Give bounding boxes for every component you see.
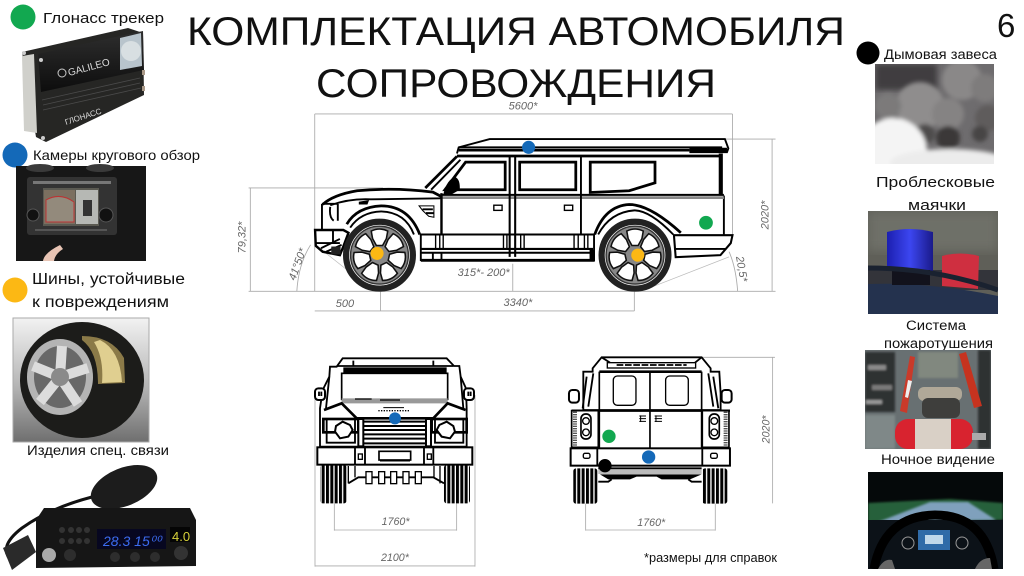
marker: yellow — [2, 278, 28, 302]
side view dimensions: 20,5* — [733, 254, 749, 283]
photo: fire suppression — [865, 350, 991, 449]
label: Система пожаротушения — [884, 318, 993, 351]
vehicle body side — [315, 139, 732, 261]
photo: night vision — [868, 472, 1003, 569]
photo: smoke — [875, 64, 994, 164]
label: Ночное видение: Ночное видение — [881, 452, 995, 467]
rear wheel — [602, 222, 668, 289]
label: Проблесковые маячки: маячки — [908, 197, 966, 214]
marker: black rear view — [598, 459, 612, 472]
front view vehicle — [315, 358, 474, 503]
rear view dimensions: 2020* — [760, 415, 772, 444]
label: Камеры кругового обзор: Камеры кругового обзор — [33, 147, 200, 163]
side view dimensions: 79,32* — [237, 221, 249, 253]
marker: black — [856, 42, 880, 64]
front view dimensions: 2100* — [380, 552, 410, 564]
marker: green — [10, 4, 36, 30]
marker: yellow front wheel — [371, 247, 384, 260]
label: Глонасс трекер: Глонасс трекер — [43, 10, 164, 27]
photo: GLONASS tracker: ГЛОНАСС — [64, 107, 103, 127]
rear view dimensions — [586, 357, 775, 531]
label: Шины, устойчивые к повреждениям: к повреждениям — [32, 294, 169, 311]
label: Проблесковые маячки — [876, 174, 995, 214]
rear view vehicle — [569, 357, 732, 504]
side view dimensions — [237, 100, 776, 311]
page number: 6 — [997, 7, 1015, 44]
side view dimensions: 3340* — [503, 297, 533, 309]
marker: blue rear view — [642, 450, 655, 464]
side view dimensions: 5600* — [509, 100, 538, 112]
rear view dimensions: 1760* — [637, 517, 666, 529]
photo: GLONASS tracker: GALILEO — [67, 57, 111, 79]
front and rear drawings — [315, 357, 775, 567]
marker: blue — [2, 142, 28, 168]
side view dimensions: 2020* — [760, 200, 772, 230]
photo: GLONASS tracker — [22, 28, 145, 142]
photo: radio: 4.0 — [172, 529, 190, 544]
front view dimensions: 1760* — [382, 516, 410, 528]
photo: radio — [3, 456, 196, 570]
marker: blue roof — [522, 141, 535, 154]
marker: yellow rear wheel — [631, 249, 644, 262]
side view drawing — [237, 100, 776, 311]
label: Система пожаротушения: пожаротушения — [884, 336, 993, 351]
side view dimensions: 315*- 200* — [458, 267, 510, 279]
label: Шины, устойчивые к повреждениям — [32, 271, 185, 311]
title — [187, 10, 845, 106]
label: Проблесковые маячки: Проблесковые — [876, 174, 995, 191]
marker: green rear view — [602, 430, 616, 443]
photo: surround camera display — [16, 164, 146, 261]
marker: blue front — [389, 412, 401, 424]
photo: radio: 28.3 15⁰⁰ — [102, 533, 163, 549]
photo: beacons — [868, 211, 998, 314]
front wheel — [346, 222, 413, 289]
side view dimensions: 41°50* — [287, 246, 310, 282]
label: Дымовая завеса: Дымовая завеса — [884, 47, 998, 62]
label: Шины, устойчивые к повреждениям: Шины, устойчивые — [32, 271, 185, 288]
title: СОПРОВОЖДЕНИЯ — [316, 62, 716, 106]
side view dimensions: 500 — [336, 298, 355, 310]
front view dimensions — [315, 395, 475, 567]
label: Система пожаротушения: Система — [906, 318, 967, 333]
title: КОМПЛЕКТАЦИЯ АВТОМОБИЛЯ — [187, 10, 845, 54]
marker: green rear — [699, 216, 713, 230]
label: Изделия спец. связи: Изделия спец. связи — [27, 442, 169, 458]
photo: run-flat tire — [13, 318, 149, 442]
footnote: *размеры для справок — [644, 550, 777, 565]
